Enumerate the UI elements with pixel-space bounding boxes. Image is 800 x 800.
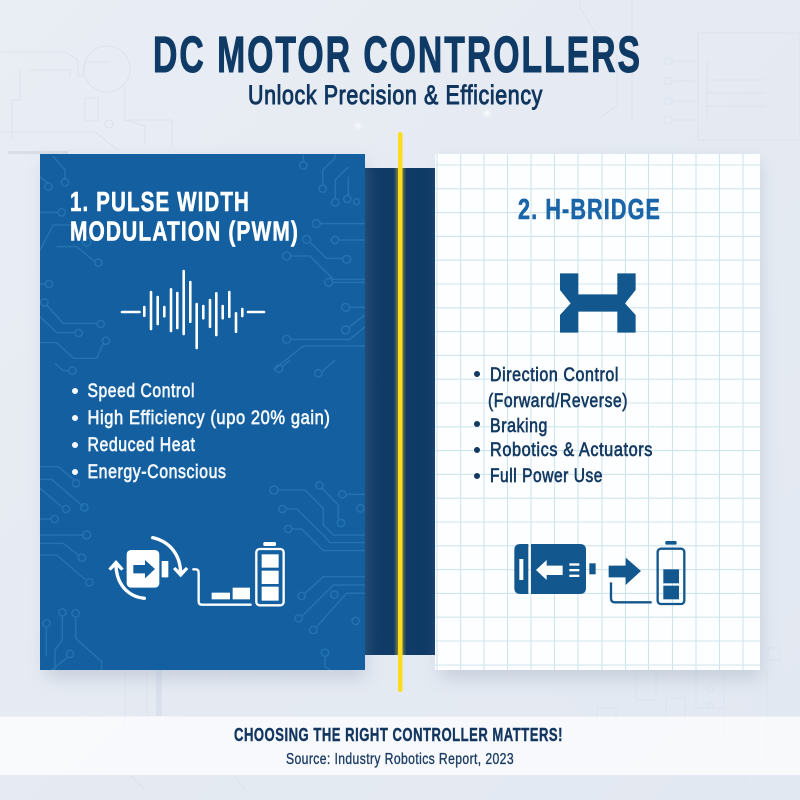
heading: h-bridge: 2. H-BRIDGE bbox=[518, 194, 661, 226]
subtitle: Unlock Precision & Efficiency bbox=[248, 80, 543, 110]
connector band between panels bbox=[365, 168, 435, 655]
list: h-bridge benefits: Direction Control bbox=[490, 364, 619, 386]
list: h-bridge benefits bbox=[474, 364, 653, 487]
heading: pulse width modulation: MODULATION (PWM) bbox=[70, 216, 299, 246]
list: PWM benefits: High Efficiency (upo 20% gain) bbox=[88, 407, 330, 429]
panel: pulse width modulation bbox=[40, 150, 365, 678]
list: h-bridge benefits: (Forward/Reverse) bbox=[488, 390, 628, 412]
list: h-bridge benefits: Robotics & Actuators bbox=[490, 439, 653, 461]
list: h-bridge benefits: Full Power Use bbox=[490, 465, 603, 487]
list: PWM benefits bbox=[72, 380, 331, 483]
heading: pulse width modulation: 1. PULSE WIDTH bbox=[70, 186, 250, 217]
footer source: Source: Industry Robotics Report, 2023 bbox=[286, 751, 514, 768]
icon: waveform bbox=[122, 271, 264, 348]
list: h-bridge benefits: Braking bbox=[490, 415, 548, 437]
panel: h-bridge bbox=[435, 154, 760, 678]
list: PWM benefits: Reduced Heat bbox=[88, 434, 196, 456]
footer banner bbox=[0, 716, 800, 775]
icon: H shape bbox=[560, 273, 636, 333]
list: PWM benefits: Energy-Conscious bbox=[88, 461, 226, 483]
yellow divider line bbox=[398, 132, 402, 692]
list: PWM benefits: Speed Control bbox=[88, 380, 195, 402]
icon: motor and battery bbox=[108, 538, 284, 605]
icon: reversed motor and battery bbox=[514, 541, 684, 604]
footer heading: CHOOSING THE RIGHT CONTROLLER MATTERS! bbox=[234, 725, 563, 745]
heading: pulse width modulation bbox=[70, 186, 299, 246]
